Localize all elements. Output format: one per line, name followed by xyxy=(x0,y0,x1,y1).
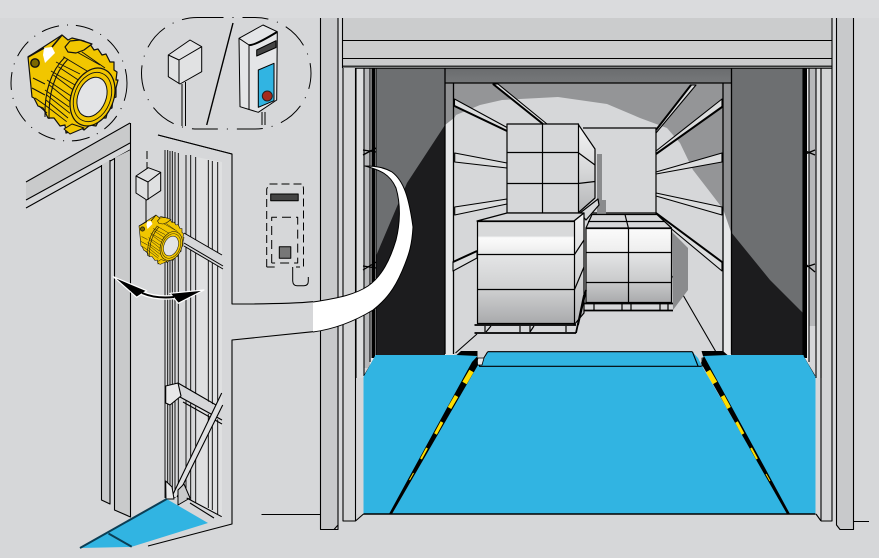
shadows behind pallets xyxy=(597,154,688,310)
junction box small xyxy=(136,151,161,222)
right door post xyxy=(816,18,869,530)
junction box xyxy=(168,40,202,126)
diagonal brace xyxy=(172,393,223,497)
central ramp xyxy=(392,352,788,514)
swing arrow xyxy=(113,277,204,303)
left wall rails xyxy=(453,84,547,271)
back pallet stack xyxy=(507,124,599,220)
hazard stripe left xyxy=(389,356,478,514)
lamp small xyxy=(139,215,187,264)
door post section xyxy=(102,160,110,504)
left door view xyxy=(26,123,232,548)
blue ramp xyxy=(80,499,208,548)
floor plate right xyxy=(703,355,816,514)
side wall outline xyxy=(148,135,320,546)
door opening interior xyxy=(376,68,803,355)
interior walls and floor xyxy=(445,68,732,355)
right pallet xyxy=(583,214,673,310)
wall band xyxy=(26,123,130,200)
upper beam xyxy=(184,233,223,269)
lower beam and bracket xyxy=(166,383,222,424)
floor plate left xyxy=(364,355,477,514)
door rails xyxy=(343,68,832,520)
callout: controls detail xyxy=(142,18,311,129)
divider slash xyxy=(207,23,233,125)
right wall rails xyxy=(656,85,722,271)
dark side bays xyxy=(376,68,803,355)
control panel xyxy=(239,25,277,125)
dock leveller xyxy=(364,351,816,514)
hazard stripe right xyxy=(701,356,790,514)
dashed device outline xyxy=(267,184,308,286)
foot bracket xyxy=(166,481,174,499)
swoosh zoom connector xyxy=(313,166,413,332)
front pallet xyxy=(474,213,586,333)
lamp large xyxy=(28,35,123,134)
callout circle: lamp detail xyxy=(11,25,127,141)
rail section xyxy=(196,157,222,516)
left door post xyxy=(320,18,364,530)
header roller box xyxy=(342,18,832,68)
bumper blocks xyxy=(456,351,728,356)
